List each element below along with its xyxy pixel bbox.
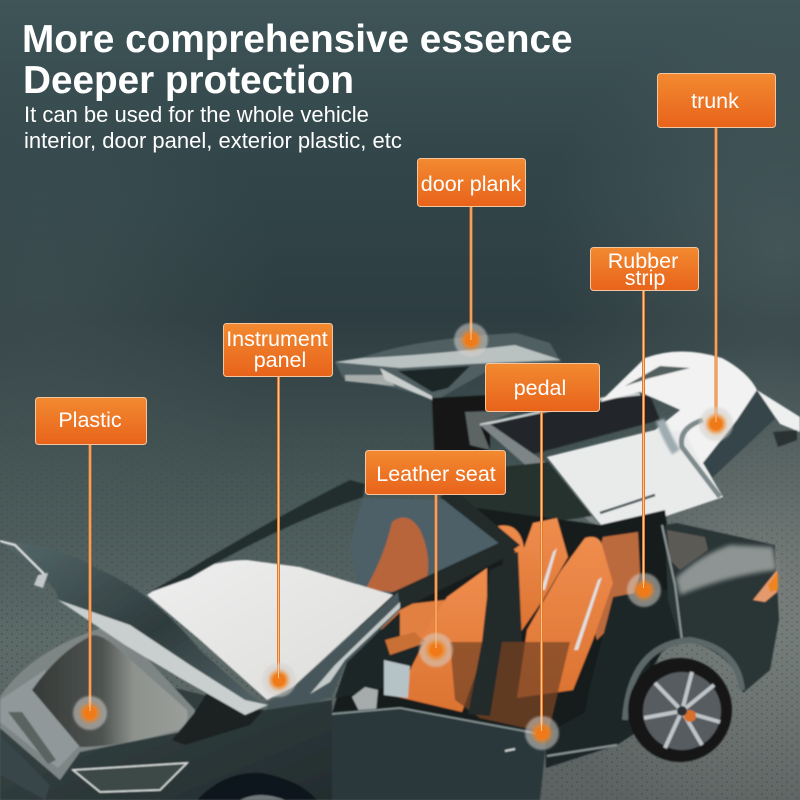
- engine bay strip: [172, 680, 262, 745]
- callout: plastic: [36, 398, 146, 730]
- A pillar: [148, 480, 365, 593]
- callout: pedal: [486, 364, 600, 750]
- callout: rubber strip: Rubber: [608, 249, 678, 273]
- callout: instrument panel: [224, 324, 332, 697]
- front wheel arch: [197, 773, 317, 800]
- hood windshield cover: [147, 560, 393, 700]
- callout: trunk: [658, 74, 776, 441]
- rear wheel: [628, 658, 732, 762]
- subtitle: interior, door panel, exterior plastic, etc: [24, 128, 402, 153]
- subtitle: [24, 102, 402, 153]
- title: More comprehensive essence: [22, 18, 572, 61]
- callout: trunk: trunk: [691, 89, 739, 113]
- rear window: [667, 530, 708, 570]
- callout: rubber strip: [590, 248, 698, 607]
- middle seat right: [517, 537, 613, 698]
- middle seat left: [498, 518, 568, 633]
- window panel: [384, 660, 410, 698]
- callout: pedal: pedal: [514, 376, 566, 400]
- front door: [332, 707, 547, 800]
- pillar strip: [662, 525, 682, 640]
- front grille: [8, 712, 56, 764]
- tail light: [753, 570, 777, 602]
- callout: leather seat: Leather seat: [376, 462, 496, 486]
- rear door sill: [545, 590, 690, 768]
- door window glass: [450, 642, 570, 733]
- near gull-wing door: [455, 352, 800, 535]
- near front seat: [390, 568, 487, 712]
- frunk surround: [0, 625, 195, 780]
- callout: instrument panel: panel: [254, 348, 306, 372]
- callout: plastic: Plastic: [58, 408, 122, 432]
- far front seat: [365, 518, 428, 592]
- side pillar strip: [266, 592, 400, 716]
- callout: rubber strip: strip: [625, 266, 665, 290]
- car illustration: [0, 333, 800, 800]
- callout: leather seat: [366, 450, 506, 667]
- bumper highlight: [0, 735, 50, 800]
- door frame pillar: [380, 488, 522, 716]
- dashboard: [335, 612, 425, 698]
- headlight: [73, 763, 187, 792]
- interior shadow: [330, 505, 680, 735]
- subtitle: It can be used for the whole vehicle: [24, 102, 369, 127]
- callout: door plank: door plank: [421, 172, 521, 196]
- rear body: [665, 523, 779, 693]
- far gull-wing door: [335, 333, 561, 490]
- side mirror: [352, 687, 378, 723]
- hood lid: [0, 541, 268, 715]
- callout: instrument panel: Instrument: [226, 327, 328, 351]
- title: Deeper protection: [23, 59, 354, 102]
- title: [22, 18, 572, 102]
- rear seat: [585, 532, 640, 640]
- frunk opening: [32, 635, 188, 747]
- wheel arch: [625, 640, 742, 720]
- car front body: [0, 660, 332, 800]
- callout: door plank: [418, 158, 526, 357]
- windshield glass: [350, 498, 510, 600]
